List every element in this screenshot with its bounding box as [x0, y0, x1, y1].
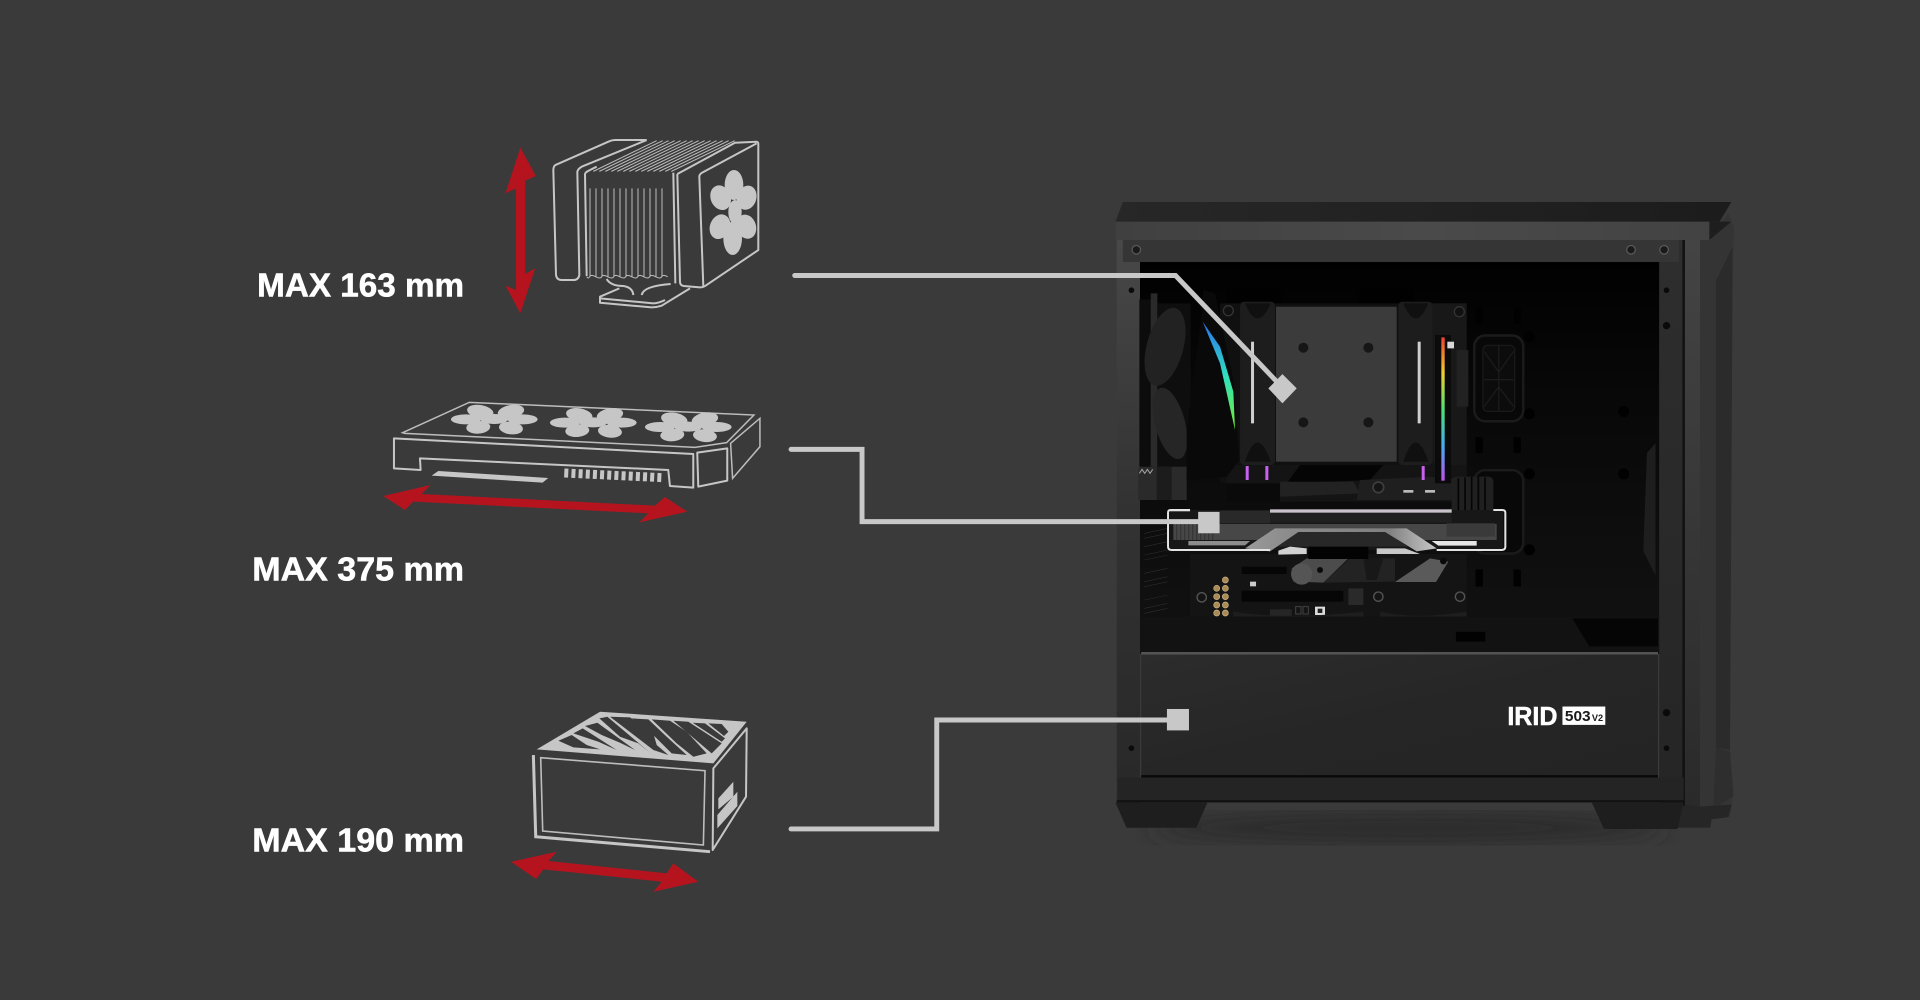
icon: CPU cooler — [553, 140, 760, 307]
logo: IRID 503 V2 — [1507, 703, 1605, 731]
cooler heatsink — [1276, 307, 1397, 462]
cable grommet lower — [1474, 470, 1523, 553]
bottom rail — [1118, 778, 1684, 802]
case top panel — [1116, 202, 1731, 239]
right post — [1659, 240, 1684, 806]
rear fan — [1137, 293, 1194, 500]
RGB memory — [1246, 335, 1454, 483]
photo: PC case — [1116, 202, 1734, 842]
cable grommet upper — [1474, 336, 1523, 421]
leader line: graphics card — [791, 449, 1220, 533]
left post — [1117, 240, 1140, 806]
icon: graphics card — [394, 402, 760, 488]
lower motherboard — [1190, 554, 1467, 617]
left foot — [1116, 803, 1207, 828]
fan glints on right — [1643, 443, 1656, 576]
arrow: cooler height — [506, 148, 536, 313]
label: MAX 375 mm: MAX 375 mm — [252, 551, 464, 588]
icon: power supply — [533, 712, 747, 852]
label: MAX 163 mm: MAX 163 mm — [257, 268, 464, 305]
label: MAX 190 mm: MAX 190 mm — [252, 823, 464, 860]
case right side — [1677, 213, 1734, 828]
interior — [1140, 262, 1659, 654]
RGB blade shard — [1187, 290, 1239, 480]
floor — [1140, 617, 1659, 654]
GPU — [1168, 509, 1505, 559]
screws — [1125, 246, 1668, 792]
leader line: cooler — [795, 276, 1297, 403]
leader line: power supply — [791, 709, 1189, 829]
arrow: graphics card length — [383, 485, 687, 522]
logo: IRID 503 V2: V2 — [1592, 713, 1603, 723]
case front band — [1116, 222, 1731, 240]
PSU shroud — [1141, 653, 1658, 776]
screw plate — [1123, 240, 1679, 262]
vent slots — [1144, 528, 1167, 613]
logo: IRID 503 V2: IRID — [1507, 703, 1558, 731]
arrow: power supply length — [511, 852, 698, 892]
motherboard upper — [1220, 303, 1468, 502]
right foot — [1592, 803, 1684, 829]
back panel cut-outs — [1227, 288, 1629, 587]
logo: IRID 503 V2: 503 — [1565, 709, 1591, 725]
cooler fans — [1240, 302, 1433, 465]
power cables — [1452, 477, 1493, 520]
